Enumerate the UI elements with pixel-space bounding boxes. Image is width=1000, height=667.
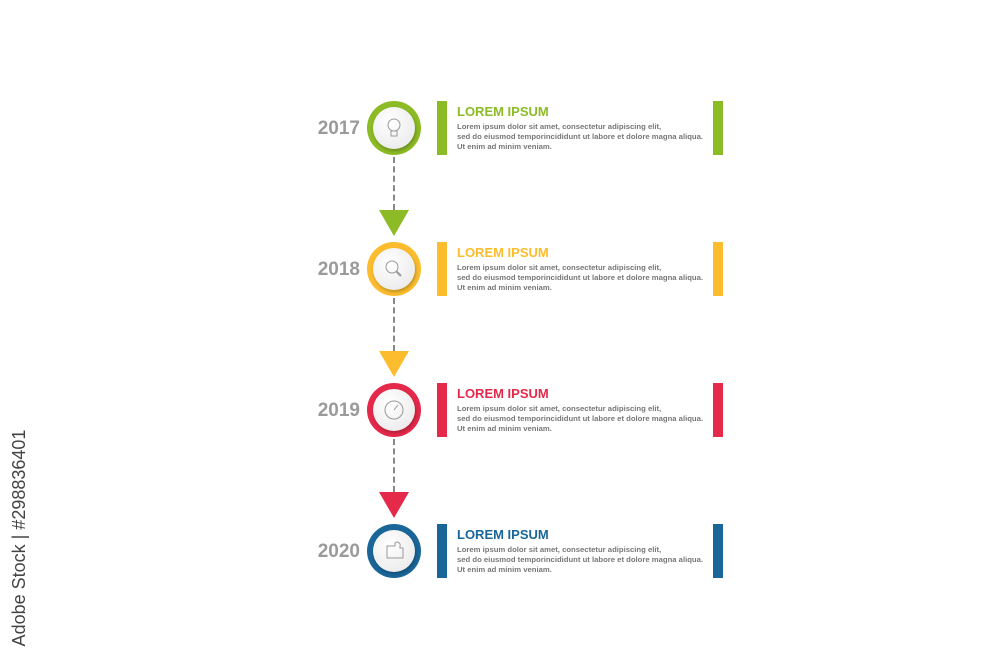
bar left bbox=[437, 524, 447, 578]
body text: Lorem ipsum dolor sit amet, consectetur adipiscing elit, bbox=[457, 545, 661, 554]
body text: Lorem ipsum dolor sit amet, consectetur adipiscing elit, bbox=[457, 263, 661, 272]
title: LOREM IPSUM bbox=[457, 104, 549, 119]
bar right bbox=[713, 524, 723, 578]
bar right bbox=[713, 101, 723, 155]
body text: Lorem ipsum dolor sit amet, consectetur adipiscing elit, bbox=[457, 122, 661, 131]
bar left bbox=[437, 242, 447, 296]
bar left bbox=[437, 383, 447, 437]
body text: Ut enim ad minim veniam. bbox=[457, 424, 552, 433]
dashed connector bbox=[393, 439, 395, 492]
year 2019: 2019 bbox=[318, 400, 360, 421]
title: LOREM IPSUM bbox=[457, 245, 549, 260]
body text: sed do eiusmod temporincididunt ut labore et dolore magna aliqua. bbox=[457, 414, 703, 423]
icon circle 2018 bbox=[367, 242, 421, 296]
body text: Ut enim ad minim veniam. bbox=[457, 283, 552, 292]
arrow yellow bbox=[379, 351, 409, 377]
icon circle 2020 bbox=[367, 524, 421, 578]
icon circle 2017 bbox=[367, 101, 421, 155]
title: LOREM IPSUM bbox=[457, 527, 549, 542]
body text: Ut enim ad minim veniam. bbox=[457, 142, 552, 151]
arrow green bbox=[379, 210, 409, 236]
body text: Ut enim ad minim veniam. bbox=[457, 565, 552, 574]
body text bbox=[457, 263, 703, 292]
body text bbox=[457, 122, 703, 151]
year 2018: 2018 bbox=[318, 259, 360, 280]
dashed connector bbox=[393, 157, 395, 210]
dashed connector bbox=[393, 298, 395, 351]
icon circle 2019 bbox=[367, 383, 421, 437]
body text: sed do eiusmod temporincididunt ut labore et dolore magna aliqua. bbox=[457, 273, 703, 282]
body text: Lorem ipsum dolor sit amet, consectetur adipiscing elit, bbox=[457, 404, 661, 413]
watermark text: Adobe Stock | #298836401 bbox=[9, 430, 29, 646]
body text: sed do eiusmod temporincididunt ut labore et dolore magna aliqua. bbox=[457, 555, 703, 564]
body text: sed do eiusmod temporincididunt ut labore et dolore magna aliqua. bbox=[457, 132, 703, 141]
bar right bbox=[713, 242, 723, 296]
bar left bbox=[437, 101, 447, 155]
title: LOREM IPSUM bbox=[457, 386, 549, 401]
arrow red bbox=[379, 492, 409, 518]
year 2020: 2020 bbox=[318, 541, 360, 562]
body text bbox=[457, 545, 703, 574]
year 2017: 2017 bbox=[318, 118, 360, 139]
bar right bbox=[713, 383, 723, 437]
body text bbox=[457, 404, 703, 433]
